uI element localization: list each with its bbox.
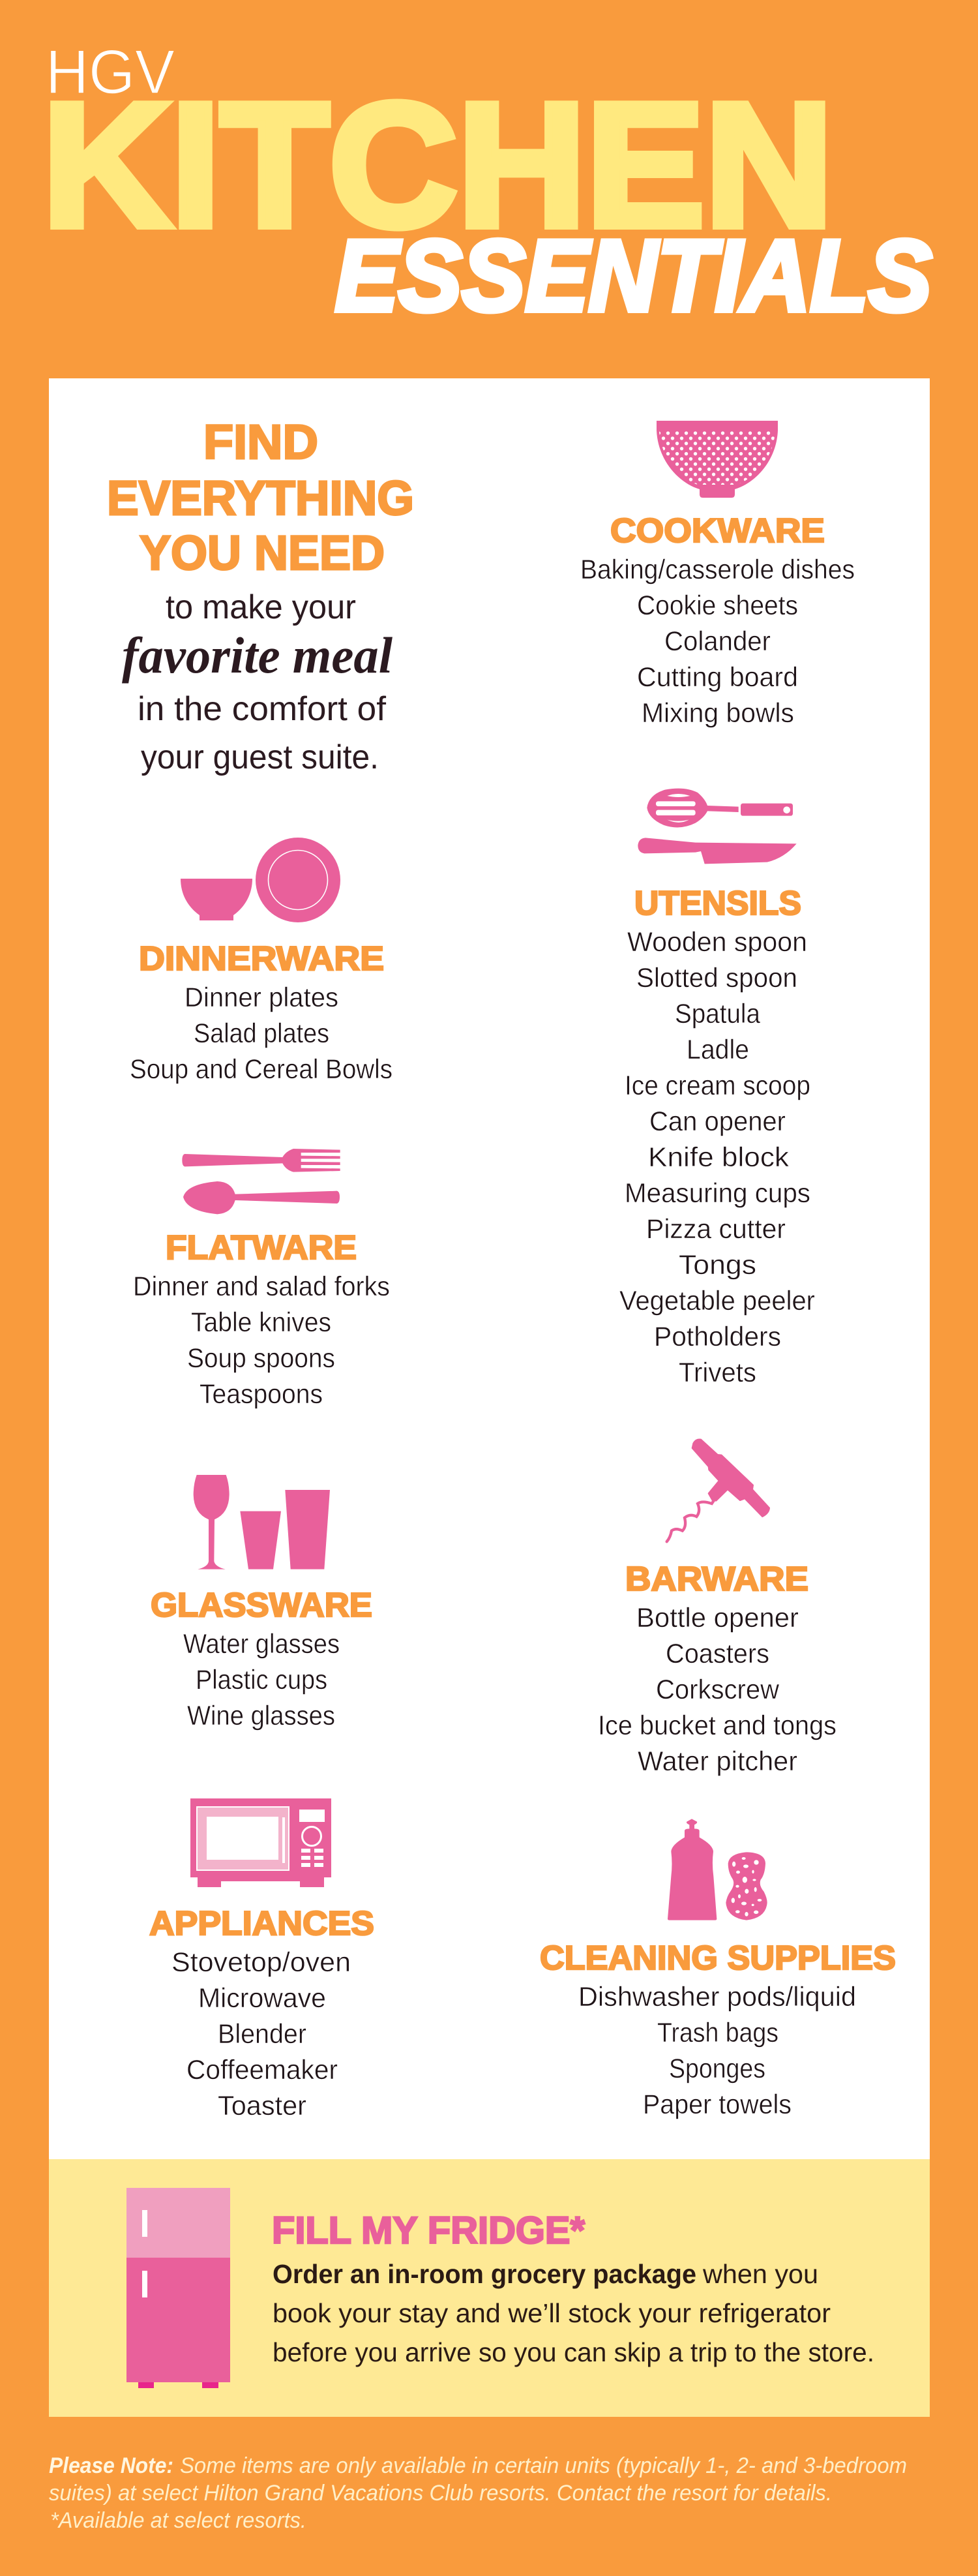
list: barware: Bottle opener [636, 1602, 799, 1633]
section: utensils [619, 789, 815, 1387]
list: cleaning supplies: Dishwasher pods/liquid [578, 1981, 856, 2012]
list: utensils: Vegetable peeler [619, 1285, 815, 1316]
intro heading: FIND [203, 415, 318, 469]
yellow background [49, 2159, 930, 2417]
list: barware [598, 1602, 837, 1776]
list: barware: Coasters [666, 1638, 769, 1669]
intro text: favorite meal [122, 627, 393, 684]
footnote: Some items are only available in certain units (typically 1-, 2- and 3-bedroom [180, 2453, 907, 2478]
intro heading: EVERYTHING [107, 471, 414, 525]
list: cookware: Mixing bowls [642, 697, 794, 728]
section: appliances [149, 1798, 374, 2121]
title: HGV: HGV [46, 37, 175, 107]
intro text: in the comfort of [138, 690, 387, 728]
list: cookware: Cookie sheets [637, 590, 798, 620]
list: dinnerware [130, 982, 393, 1084]
section: flatware [133, 1149, 390, 1409]
list: barware: Ice bucket and tongs [598, 1710, 837, 1740]
fridge description [273, 2259, 874, 2367]
list: barware: Corkscrew [656, 1674, 780, 1705]
fridge description: book your stay and we’ll stock your refrigerator [273, 2298, 831, 2328]
list: cleaning supplies: Trash bags [657, 2017, 778, 2048]
list: utensils: Pizza cutter [646, 1213, 786, 1244]
heading: appliances: APPLIANCES [149, 1905, 374, 1943]
list: flatware [133, 1271, 390, 1409]
list: glassware [183, 1628, 340, 1731]
list: appliances: Stovetop/oven [171, 1947, 351, 1977]
list: cookware [580, 554, 855, 728]
icon: wine glass and cups [194, 1475, 330, 1569]
heading: dinnerware: DINNERWARE [139, 940, 384, 978]
title: ESSENTIALS: ESSENTIALS [335, 219, 932, 332]
section: cookware [580, 421, 855, 728]
fridge description: before you arrive so you can skip a trip to the store. [273, 2337, 874, 2367]
footnote [49, 2453, 907, 2533]
list: utensils: Spatula [675, 998, 761, 1029]
list: cleaning supplies: Sponges [669, 2053, 765, 2084]
footnote: Please Note: [49, 2453, 173, 2478]
intro block [107, 415, 414, 776]
icon: slotted spoon and knife [638, 789, 797, 864]
heading: cookware: COOKWARE [610, 512, 825, 550]
intro heading: YOU NEED [140, 526, 385, 580]
fridge description: when you [702, 2259, 818, 2289]
list: flatware: Soup spoons [187, 1342, 335, 1373]
heading: flatware: FLATWARE [166, 1229, 357, 1267]
list: dinnerware: Salad plates [194, 1018, 329, 1048]
list: utensils: Can opener [649, 1106, 786, 1136]
list: flatware: Table knives [191, 1307, 331, 1337]
list: utensils: Wooden spoon [627, 926, 807, 957]
intro text: your guest suite. [141, 738, 379, 776]
list: appliances: Microwave [198, 1982, 326, 2013]
list: glassware: Plastic cups [196, 1664, 327, 1695]
heading: fill my fridge: FILL MY FRIDGE* [272, 2209, 585, 2252]
list: utensils: Trivets [679, 1357, 756, 1387]
icon: corkscrew [667, 1439, 769, 1541]
list: barware: Water pitcher [638, 1746, 797, 1776]
intro text [122, 588, 393, 776]
intro text: to make your [166, 588, 356, 626]
list: utensils: Ladle [687, 1034, 749, 1065]
icon: dish soap bottle and sponge [668, 1819, 767, 1920]
panel: fill my fridge [49, 2159, 930, 2417]
heading: cleaning supplies: CLEANING SUPPLIES [540, 1939, 896, 1977]
heading: utensils: UTENSILS [634, 885, 801, 922]
title: KITCHEN: KITCHEN [42, 67, 833, 264]
icon: fork and spoon [182, 1149, 340, 1214]
footnote: suites) at select Hilton Grand Vacations Club resorts. Contact the resort for details. [49, 2481, 832, 2506]
list: cookware: Cutting board [637, 661, 798, 692]
list: cookware: Colander [664, 626, 771, 656]
list: appliances: Toaster [218, 2090, 306, 2121]
list: dinnerware: Soup and Cereal Bowls [130, 1053, 393, 1084]
list: utensils: Potholders [654, 1321, 781, 1352]
fridge description: Order an in-room grocery package [273, 2259, 696, 2289]
heading: barware: BARWARE [625, 1560, 808, 1598]
section: cleaning supplies [540, 1819, 896, 2119]
list: flatware: Dinner and salad forks [133, 1271, 390, 1301]
section: dinnerware [130, 838, 393, 1084]
list: appliances: Blender [218, 2018, 306, 2049]
section: glassware [151, 1475, 372, 1731]
icon: colander [657, 421, 778, 498]
list: utensils: Ice cream scoop [625, 1070, 810, 1100]
list: cleaning supplies: Paper towels [643, 2089, 792, 2119]
list: appliances: Coffeemaker [186, 2054, 338, 2085]
list: utensils: Tongs [679, 1249, 756, 1280]
list: dinnerware: Dinner plates [185, 982, 338, 1012]
list: cleaning supplies [578, 1981, 856, 2119]
list: utensils: Knife block [648, 1142, 790, 1172]
list: flatware: Teaspoons [200, 1378, 323, 1409]
list: utensils [619, 926, 815, 1387]
title [42, 37, 932, 332]
heading: glassware: GLASSWARE [151, 1586, 372, 1624]
panel: white content area [49, 378, 930, 2159]
icon: bowl and plate [181, 838, 340, 922]
icon: microwave [190, 1798, 331, 1887]
list: cookware: Baking/casserole dishes [580, 554, 855, 584]
list: utensils: Slotted spoon [636, 962, 797, 993]
footnote: *Available at select resorts. [50, 2508, 306, 2533]
list: glassware: Wine glasses [187, 1700, 335, 1731]
list: appliances [171, 1947, 351, 2121]
intro heading [107, 415, 414, 580]
icon: fridge [126, 2188, 230, 2388]
list: utensils: Measuring cups [625, 1177, 810, 1208]
list: glassware: Water glasses [183, 1628, 340, 1659]
section: barware [598, 1439, 837, 1776]
